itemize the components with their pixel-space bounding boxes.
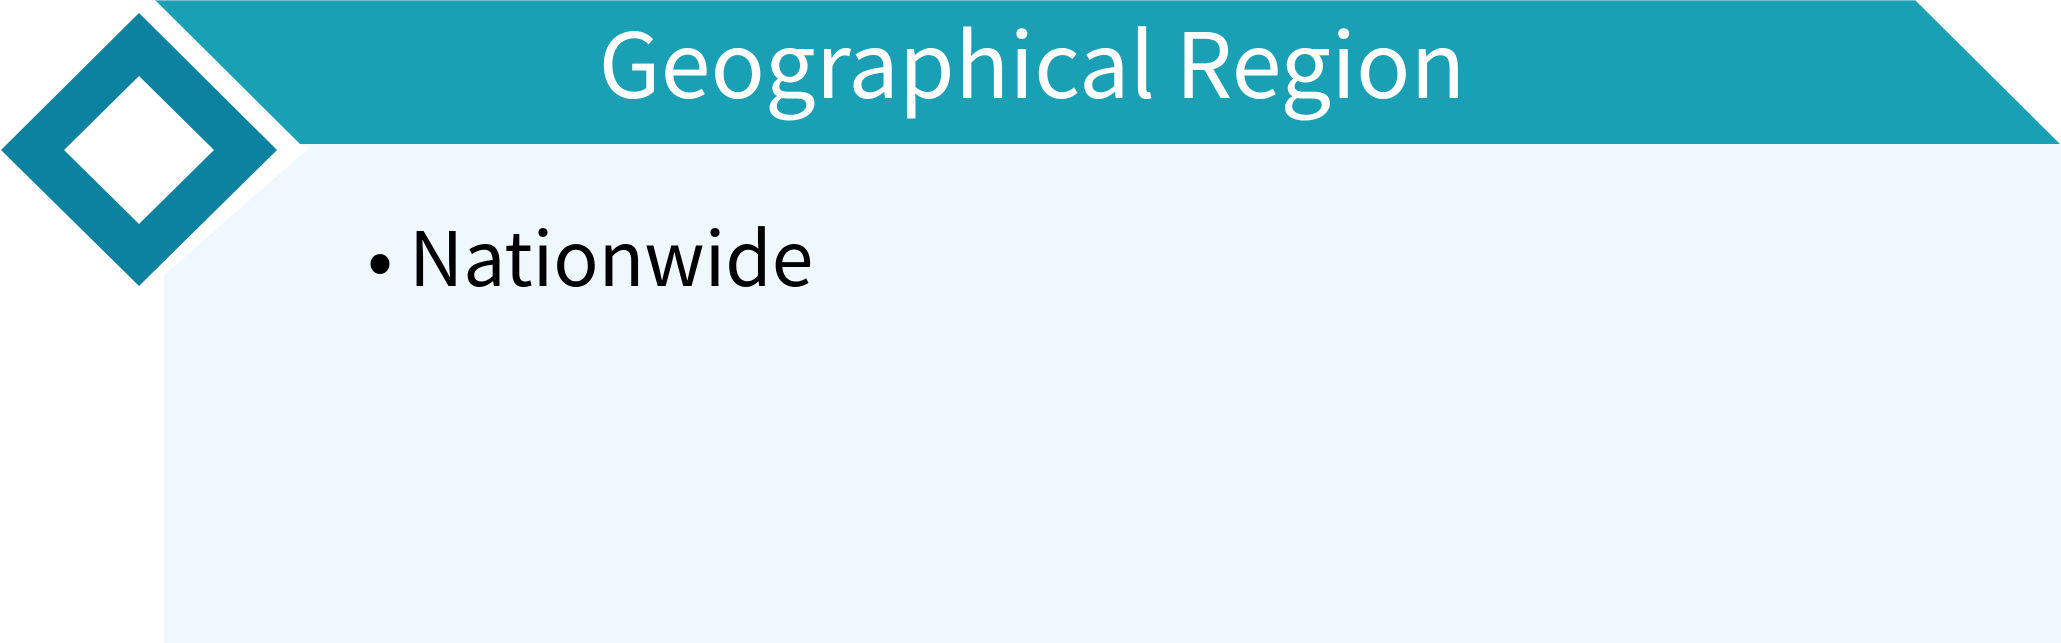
icon: diamond — [1, 13, 277, 286]
panel: content background — [164, 144, 2061, 643]
bullet item: Nationwide: Nationwide — [409, 199, 813, 308]
header banner — [155, 0, 2060, 144]
